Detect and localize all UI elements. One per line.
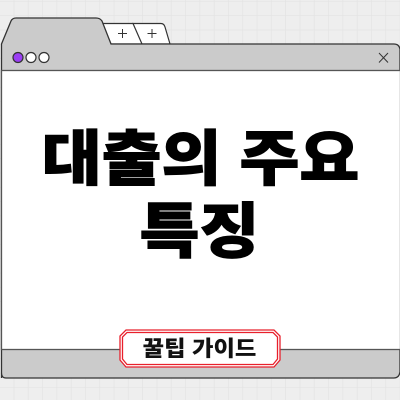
inactive tabs xyxy=(102,24,170,44)
badge label: 꿀팁 가이드 xyxy=(143,337,256,361)
title second line: 특징 xyxy=(140,199,259,266)
icon: plus second tab xyxy=(148,29,156,38)
badge: tip guide xyxy=(120,330,280,367)
content panel xyxy=(2,70,400,350)
icon: close xyxy=(379,53,388,62)
icon: plus xyxy=(118,29,127,38)
title: 대출의 주요 xyxy=(42,126,359,193)
window control dots xyxy=(13,52,49,62)
